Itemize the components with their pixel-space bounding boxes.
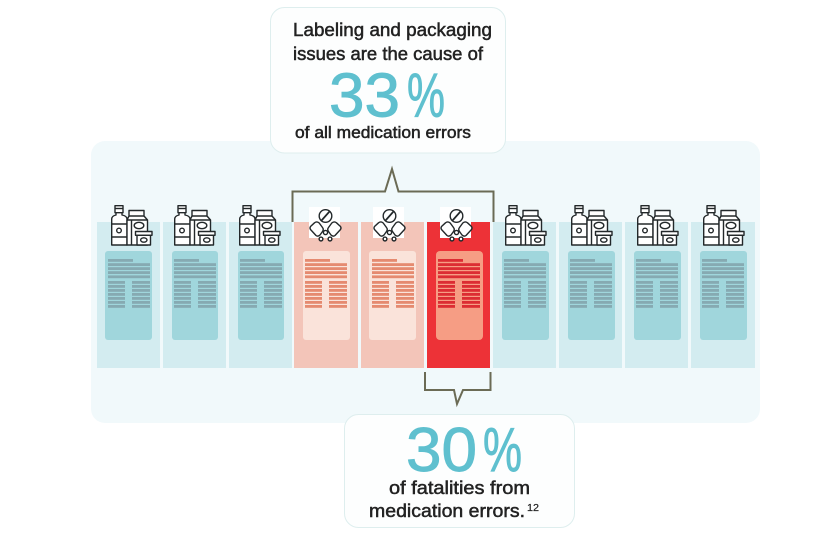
callout caption: of fatalities from [389,477,530,498]
callout caption: medication errors. [369,500,525,521]
callout heading text: Labeling and packaging [293,19,492,40]
bracket: bottom callout pointer [425,372,490,404]
statistic: 30%: 30 [406,416,477,485]
column 7: label [493,222,556,368]
column 8: label [559,222,622,368]
icon: packaging 5 [572,206,612,245]
callout heading text: issues are the cause of [293,43,484,64]
callout caption: 12 [527,503,539,514]
bracket: top callout pointer [292,169,494,222]
icon: pills 3 [440,207,472,241]
callout caption [369,477,539,521]
icon: packaging 4 [506,206,546,245]
background panel [91,141,760,423]
statistic: 30% [406,416,522,485]
column 5: highlighted label [361,222,424,368]
icon: packaging 2 [175,206,215,245]
callout caption: of all medication errors [295,124,471,142]
icon: packaging 1 [112,206,152,245]
icon: packaging 3 [240,206,280,245]
statistic: 33%: % [407,62,445,130]
column 1: label [97,222,160,368]
callout: fatalities 30% [344,414,574,528]
statistic: 33% [329,62,445,130]
icon: packaging 7 [704,206,744,245]
column 2: label [163,222,226,368]
column 10: label [691,222,755,368]
callout: labeling and packaging 33% [270,8,506,153]
statistic: 30%: % [483,416,522,485]
callout heading text [293,19,492,64]
icon: packaging 6 [638,206,678,245]
column 9: label [625,222,688,368]
icon: pills 2 [373,207,405,241]
row of ten medication label columns [97,222,755,368]
statistic: 33%: 33 [329,62,400,130]
column 4: highlighted label [294,222,358,368]
column 6: red label [427,222,490,368]
icon: pills 1 [309,207,341,241]
column 3: label [229,222,292,368]
